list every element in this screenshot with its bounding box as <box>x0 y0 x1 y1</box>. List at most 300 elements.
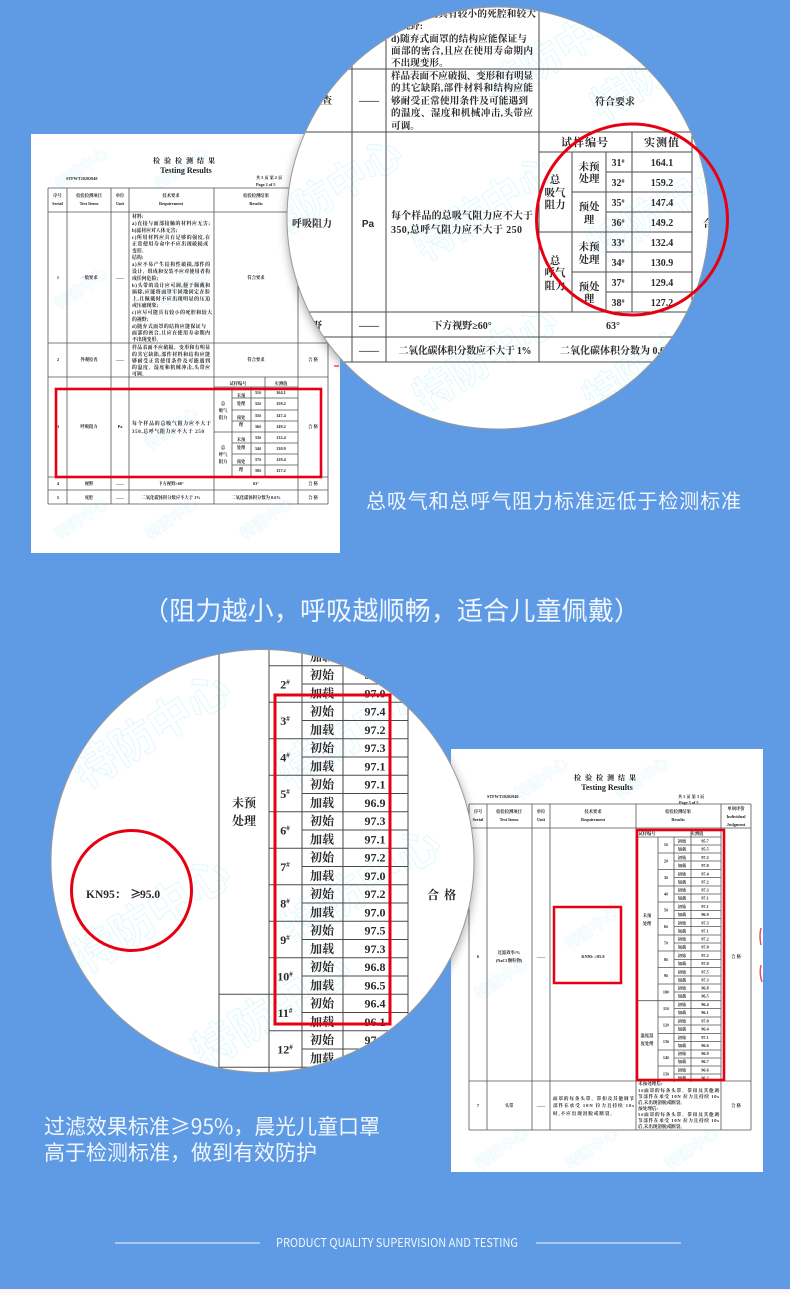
panel: test report page 2: 一般要求 <box>80 274 98 281</box>
footer: product quality tagline: PRODUCT QUALITY SUPERVISION AND TESTING <box>276 1234 518 1251</box>
caption: resistance far below standard: 总吸气和总呼气阻力标准远低于检测标准 <box>366 485 741 514</box>
panel: test report page 2: 样品表面不应破损、变形和有明显 <box>132 344 210 351</box>
panel: test report page 3: 加载 <box>678 992 687 1000</box>
magnifier: breathing resistance detail: 149.2 <box>651 218 673 229</box>
panel: test report page 3: 加载 <box>678 976 687 984</box>
panel: test report page 2: 材料: <box>132 213 144 220</box>
magnifier: breathing resistance detail: 31 <box>612 158 622 169</box>
magnifier: breathing resistance detail: 特防中心 <box>246 121 412 255</box>
magnifier: filtration efficiency detail: # <box>289 970 293 978</box>
panel: test report page 3: 4# <box>664 892 669 896</box>
panel: test report page 3: 初始 <box>678 903 687 910</box>
magnifier: breathing resistance detail: 132.4 <box>651 238 673 249</box>
magnifier: filtration efficiency detail: 加载 <box>310 795 335 810</box>
magnifier: breathing resistance detail: 符合要求 <box>595 95 635 108</box>
panel: test report page 3: 部件在承受 10N 拉力且持续 10s <box>553 1102 634 1109</box>
panel: test report page 2: 特防中心 <box>151 262 212 314</box>
magnifier: filtration efficiency detail: # <box>286 934 290 942</box>
panel: test report page 2: 159.2 <box>276 401 286 406</box>
panel: test report page 2: 5 <box>57 495 59 500</box>
panel: test report page 3: Results <box>671 817 685 822</box>
panel: test report page 2: 38# <box>255 468 262 473</box>
magnifier: breathing resistance detail: 特防中心 <box>578 0 744 132</box>
magnifier: filtration efficiency detail: # <box>286 752 290 760</box>
magnifier: filtration efficiency detail: 未预 <box>232 795 257 810</box>
panel: test report page 3: 技术要求 <box>584 808 602 815</box>
panel: test report page 2: a)应不易产生结构性破损,部件的 <box>132 261 210 268</box>
magnifier: breathing resistance detail: 127.2 <box>651 298 673 309</box>
panel: test report page 3: 97.0 <box>701 1018 709 1024</box>
panel: test report page 2: 阻力 <box>219 414 227 421</box>
panel: test report page 2: 33# <box>255 435 262 440</box>
panel: test report page 2: 正常使用寿命中不应出现破损或 <box>132 240 208 248</box>
panel: test report page 3: 96.4 <box>701 1026 710 1032</box>
magnifier: filtration efficiency detail: 97.1 <box>364 832 386 846</box>
panel: test report page 2: 特防中心 <box>141 492 202 544</box>
magnifier: breathing resistance detail: 32 <box>612 178 622 189</box>
magnifier: filtration efficiency detail: 加载 <box>310 904 335 919</box>
magnifier: filtration efficiency detail: 加载 <box>310 722 335 737</box>
red highlight: breathing resistance row <box>56 389 321 477</box>
panel: test report page 2: 变形。 <box>132 248 147 254</box>
magnifier: breathing resistance detail: 理 <box>584 214 595 226</box>
panel: test report page 2: 特防中心 <box>51 492 112 544</box>
panel: test report page 2: 3 <box>57 424 59 429</box>
panel: test report page 2: 或压痛现象; <box>132 302 158 309</box>
panel: test report page 3: 特防中心 <box>471 1122 532 1174</box>
magnifier: breathing resistance detail: 特防中心 <box>576 138 742 272</box>
panel: test report page 2: 总 <box>221 444 226 451</box>
panel: test report page 2: 不出现变形。 <box>132 336 161 343</box>
magnifier: breathing resistance detail: # <box>622 299 624 305</box>
magnifier: breathing resistance detail: 特防中心 <box>401 288 567 422</box>
panel: test report page 3: 试样编号 <box>638 830 656 837</box>
panel: test report page 2: 死腔 <box>85 494 94 501</box>
panel: test report page 2: 特防中心 <box>151 142 212 194</box>
magnifier: breathing resistance detail: 下方视野≥60° <box>432 319 492 332</box>
panel: test report page 3: 97.3 <box>701 888 709 892</box>
panel: test report page 2: 检验检测项目 <box>76 192 102 199</box>
panel: test report page 2: Pa <box>118 424 123 429</box>
panel: test report page 2: 32# <box>255 401 262 406</box>
panel: test report page 3: 7# <box>664 940 669 946</box>
panel: test report page 3: 初始 <box>678 870 687 878</box>
panel: test report page 3: 加载 <box>678 846 687 852</box>
panel: test report page 3: 95.7 <box>701 838 709 844</box>
panel: test report page 2: 1 <box>57 275 59 280</box>
magnifier: breathing resistance detail: Pa <box>362 219 375 230</box>
magnifier: breathing resistance detail: 实测值 <box>644 135 680 149</box>
panel: test report page 3: 预处理后: <box>638 1105 658 1112</box>
panel: test report page 2: 147.4 <box>276 413 287 418</box>
panel: test report page 3: 97.4 <box>701 872 710 876</box>
panel: test report page 2: 视野 <box>85 480 94 487</box>
panel: test report page 2: 处理 <box>237 400 246 407</box>
magnifier: breathing resistance detail: 的视野: <box>391 20 423 32</box>
panel: test report page 2: 37# <box>255 457 262 462</box>
magnifier: breathing resistance detail: 特防中心 <box>401 138 567 272</box>
panel: test report page 2: 结构: <box>132 254 144 261</box>
panel: test report page 3: 特防中心 <box>611 752 672 804</box>
magnifier: filtration efficiency detail: 处理 <box>232 813 256 828</box>
panel: test report page 2: 合 格 <box>308 480 319 487</box>
magnifier: filtration efficiency detail: 7 <box>280 860 286 874</box>
panel: test report page 3: 初始 <box>678 838 687 844</box>
panel: test report page 3: 6# <box>664 924 669 929</box>
magnifier: filtration efficiency detail: # <box>289 1044 293 1052</box>
red highlight: filtration results column <box>637 830 724 1080</box>
magnifier: breathing resistance detail: 吸气 <box>544 186 566 199</box>
panel: test report page 3: 96.4 <box>701 1002 710 1007</box>
panel: test report page 2: b)头带的设计应可调,便于佩戴和 <box>132 282 210 289</box>
panel: test report page 2: 阻力 <box>219 458 227 465</box>
panel: test report page 2: 二氧化碳体积分数为 0.6% <box>231 494 281 501</box>
magnifier: filtration efficiency detail: 合 格 <box>427 887 457 902</box>
panel: test report page 2: 130.9 <box>276 446 286 451</box>
panel: test report page 3: 加载 <box>678 1074 687 1082</box>
panel: test report page 3: 加载 <box>678 894 687 902</box>
magnifier shadow on report page 2 <box>281 134 340 370</box>
panel: test report page 3: 5# <box>664 908 669 912</box>
magnifier: filtration efficiency detail: 97.3 <box>364 942 386 956</box>
panel: test report page 3: 3# <box>664 875 669 880</box>
magnifier: breathing resistance detail: c)应尽可能具有较小的死腔和较大 <box>391 8 536 20</box>
panel: test report page 2: 164.1 <box>276 390 286 395</box>
magnifier: filtration efficiency detail: 12 <box>277 1042 289 1056</box>
panel: test report page 2: 处理 <box>237 444 246 451</box>
panel: test report page 2: 合 格 <box>308 356 319 363</box>
magnifier: breathing resistance detail: 阻力 <box>544 198 566 211</box>
panel: test report page 2: 特防中心 <box>236 492 297 544</box>
magnifier: filtration efficiency detail: 6 <box>280 824 286 838</box>
panel: test report page 3: 14# <box>663 1055 670 1060</box>
panel: test report page 2 <box>31 134 340 553</box>
panel: test report page 3: 初始 <box>678 886 687 894</box>
magnifier: filtration efficiency detail: 特防中心 <box>58 653 241 801</box>
panel: test report page 2: 合 格 <box>308 423 319 430</box>
panel: test report page 3: 97.1 <box>701 928 709 934</box>
magnifier: breathing resistance detail: 37 <box>612 278 622 289</box>
panel: test report page 2: 特防中心 <box>141 402 202 454</box>
panel: test report page 3: 加载 <box>678 1009 687 1016</box>
panel: test report page 3: 单位 <box>537 808 546 815</box>
panel: test report page 3: 未预 <box>643 912 652 919</box>
panel: test report page 3: 检验检测项目 <box>496 808 522 815</box>
magnifier: filtration efficiency detail: 初始 <box>310 959 335 974</box>
magnifier: filtration efficiency detail: 加载 <box>310 868 335 883</box>
panel: test report page 3: 加载 <box>678 928 687 934</box>
magnifier: breathing resistance detail: 预处 <box>578 280 600 293</box>
panel: test report page 3: 面罩的每条头带、带扣及其他调节 <box>553 1095 634 1102</box>
panel: test report page 3: 96.7 <box>701 1059 709 1064</box>
magnifier: breathing resistance detail: # <box>622 239 624 245</box>
magnifier: breathing resistance detail: 特防中心 <box>571 291 737 425</box>
magnifier: filtration efficiency detail: 96.8 <box>364 960 386 974</box>
panel: test report page 2: —— <box>115 481 125 486</box>
magnifier: filtration efficiency detail: 97.0 <box>364 1033 386 1047</box>
panel: test report page 2: 的视野; <box>132 316 149 323</box>
caption: filtration above standard <box>44 1111 380 1167</box>
panel: test report page 2: 未预 <box>237 392 246 399</box>
magnifier: filtration efficiency detail: 97.0 <box>364 905 386 919</box>
magnifier: breathing resistance detail: —— <box>358 96 380 107</box>
panel: test report page 3: 节部件在承受 10N 拉力且持续 10s <box>638 1117 719 1124</box>
panel: test report page 3: 9# <box>664 973 669 978</box>
magnifier: breathing resistance detail: # <box>622 179 624 185</box>
magnifier: filtration efficiency detail: 初始 <box>310 886 335 901</box>
magnifier: breathing resistance detail: 未预 <box>578 160 600 173</box>
panel: test report page 2: 检验检测结果 <box>243 192 270 199</box>
panel: test report page 3: Individual <box>726 814 746 819</box>
panel: test report page 2: a)直接与面部接触的材料应无害; <box>132 220 210 227</box>
panel: test report page 3: 5#面罩的每条头带、带扣及其他调 <box>638 1111 719 1118</box>
panel: test report page 3: Test Items <box>500 817 519 822</box>
magnifier: filtration efficiency detail: 加载 <box>310 1050 335 1065</box>
panel: test report page 3: 加载 <box>678 911 687 918</box>
magnifier: filtration efficiency detail: 5 <box>280 787 286 801</box>
panel: test report page 2: 预处 <box>237 458 246 465</box>
magnifier: filtration efficiency detail: 97.1 <box>364 759 386 773</box>
panel: test report page 3: 度处理 <box>641 1040 654 1047</box>
panel: test report page 2: Testing Results <box>160 166 212 175</box>
panel: test report page 3: 6 <box>477 954 480 959</box>
panel: test report page 2: 2 <box>57 357 59 362</box>
magnifier: filtration efficiency detail: 97.5 <box>364 924 386 938</box>
panel: test report page 3: 15# <box>663 1072 670 1076</box>
panel: test report page 3: 初始 <box>678 968 687 976</box>
panel: test report page 3: 特防中心 <box>561 902 622 954</box>
panel: test report page 3: 97.0 <box>701 863 709 868</box>
panel: test report page 3: —— <box>536 1103 546 1108</box>
magnifier: breathing resistance detail: —— <box>358 346 380 357</box>
magnifier: breathing resistance detail: 36 <box>612 218 622 229</box>
magnifier: breathing resistance detail: 二氧化碳体积分数为 0.6% <box>560 344 675 357</box>
panel: test report page 3: 97.3 <box>701 978 709 982</box>
magnifier: filtration efficiency detail: KN95： <box>86 889 126 901</box>
panel: test report page 2: 4 <box>57 481 60 486</box>
panel: test report page 2: 总 <box>221 400 226 407</box>
panel: test report page 3: 加载 <box>678 1026 687 1032</box>
magnifier: breathing resistance detail: 34 <box>612 258 622 269</box>
magnifier: filtration efficiency detail: # <box>286 861 290 869</box>
panel: test report page 3: 96.6 <box>701 1068 709 1072</box>
magnifier: filtration efficiency detail: 97.4 <box>364 704 386 718</box>
magnifier shadow on report page 3 <box>451 755 480 973</box>
magnifier: breathing resistance detail: # <box>622 159 624 165</box>
magnifier: filtration efficiency detail: 特防中心 <box>263 653 446 801</box>
panel: test report page 3: 初始 <box>678 1018 687 1024</box>
panel: test report page 2: 149.2 <box>276 424 286 429</box>
magnifier: breathing resistance detail: 164.1 <box>651 158 673 169</box>
panel: test report page 3: 加载 <box>678 862 687 869</box>
panel: test report page 2: 每个样品的总吸气阻力应不大于 <box>132 420 211 427</box>
magnifier: filtration efficiency detail: # <box>286 898 290 906</box>
panel: test report page 3: 初始 <box>678 1066 687 1074</box>
magnifier: filtration efficiency detail: 97.2 <box>364 723 386 737</box>
magnifier: filtration efficiency detail: 初始 <box>310 667 335 682</box>
panel: test report page 3: 97.1 <box>701 904 709 909</box>
panel: test report page 2: 试样编号 <box>229 380 247 387</box>
panel: test report page 3: 97.2 <box>701 855 709 860</box>
magnifier: filtration efficiency detail: # <box>286 678 290 686</box>
panel: test report page 3: 97.0 <box>701 944 709 950</box>
red circle: measured resistance values <box>536 124 728 315</box>
panel: test report page 2: 设计、组成和安装不应对使用者构 <box>132 268 210 275</box>
panel: test report page 3: 特防中心 <box>511 752 572 804</box>
panel: test report page 3: 头带 <box>505 1102 514 1109</box>
panel: test report page 2: 序号 <box>53 192 62 199</box>
panel: test report page 3: 95.5 <box>701 846 709 852</box>
panel: test report page 2: 摘除,应能将面罩牢固地固定在脸 <box>132 288 210 296</box>
panel: test report page 3: KN95: ≥95.0 <box>581 954 605 959</box>
panel: test report page 2: b)滤材应对人体无害; <box>132 227 177 234</box>
panel: test report page 3: 97.2 <box>701 880 709 884</box>
panel: test report page 3: 初始 <box>678 984 687 992</box>
magnifier: filtration efficiency detail: 97.0 <box>364 686 386 700</box>
magnifier: filtration efficiency detail: 初始 <box>310 850 335 864</box>
panel: test report page 3: 合 格 <box>731 953 742 960</box>
magnifier: filtration efficiency detail: 加载 <box>310 977 335 992</box>
magnifier: filtration efficiency detail: # <box>286 824 290 832</box>
magnifier: filtration efficiency detail: 11 <box>278 1006 289 1020</box>
panel: test report page 3: 共 5 页 第 3 页 <box>678 793 705 800</box>
magnifier: breathing resistance detail: 130.9 <box>651 258 673 269</box>
magnifier: breathing resistance detail: 总 <box>550 173 561 186</box>
panel: test report page 3: (NaCl 颗粒物) <box>496 957 523 964</box>
panel: test report page 3: 97.1 <box>701 1035 709 1040</box>
magnifier: breathing resistance detail: 呼吸阻力 <box>292 217 332 230</box>
panel: test report page 3: 96.2 <box>701 1076 709 1080</box>
magnifier: filtration efficiency detail: 加载 <box>310 758 335 773</box>
panel: test report page 3: 96.9 <box>701 1051 709 1056</box>
magnifier: breathing resistance detail: 样品表面不应破损、变形和有明显 <box>391 70 533 82</box>
panel: test report page 3: 97.3 <box>701 920 709 926</box>
panel: test report page 3: 10# <box>663 990 670 994</box>
magnifier: breathing resistance detail: 合 <box>703 217 713 230</box>
panel: test report page 3: 单项评价 <box>727 805 745 812</box>
panel: test report page 2: 的温度、湿度和机械冲击,头带应 <box>132 364 210 371</box>
panel: test report page 3: 后,未出现滑脱或断裂。 <box>638 1099 685 1106</box>
magnifier: breathing resistance detail: 63° <box>606 321 620 332</box>
panel: test report page 2: 吸气 <box>219 407 228 414</box>
panel: test report page 3: 加载 <box>678 878 687 886</box>
magnifier: breathing resistance detail: 呼气 <box>544 266 566 279</box>
magnifier: filtration efficiency detail: # <box>286 715 290 723</box>
panel: test report page 2: 符合要求 <box>247 356 265 363</box>
panel: test report page 3 <box>451 749 763 1174</box>
panel: test report page 2: 理 <box>239 421 244 427</box>
panel: test report page 2: 31# <box>255 390 262 395</box>
magnifier: breathing resistance detail: 的其它缺陷,部件材料和结构应能 <box>391 82 533 94</box>
panel: test report page 2: 350,总呼气阻力应不大于 250 <box>132 428 205 435</box>
panel: test report page 2: 36# <box>255 424 262 429</box>
magnifier: breathing resistance detail: # <box>622 259 624 265</box>
panel: test report page 3: 初始 <box>678 854 687 861</box>
panel: test report page 3: Testing Results <box>581 783 633 792</box>
panel: test report page 3: 96.5 <box>701 994 709 998</box>
panel: test report page 3: STFWT20202940 <box>487 794 518 799</box>
panel: test report page 2: 理 <box>239 466 244 472</box>
magnifier: breathing resistance detail: 35 <box>612 198 622 209</box>
red circle: KN95 requirement <box>72 830 192 950</box>
panel: test report page 2: Unit <box>116 201 125 206</box>
panel: test report page 3: 特防中心 <box>471 952 532 1004</box>
panel: test report page 2: —— <box>115 357 125 362</box>
panel: test report page 2: 129.4 <box>276 457 287 462</box>
panel: test report page 2: 合 格 <box>308 494 319 501</box>
magnifier: breathing resistance detail: 每个样品的总吸气阻力应不大于 <box>391 209 533 222</box>
panel: test report page 3: —— <box>536 954 546 959</box>
magnifier: filtration efficiency detail: 特防中心 <box>58 838 241 986</box>
magnifier: filtration efficiency detail: 96.4 <box>364 1051 386 1065</box>
panel: test report page 3: 加载 <box>678 960 687 967</box>
panel: test report page 2: 下方视野≥60° <box>158 480 184 487</box>
panel: test report page 2: 特防中心 <box>51 262 112 314</box>
panel: test report page 3: 初始 <box>678 1050 687 1057</box>
magnifier: breathing resistance detail: 159.2 <box>651 178 673 189</box>
panel: test report page 3: 节部件在承受 10N 拉力且持续 10s <box>638 1093 719 1100</box>
panel: test report page 2: d)随弃式面罩的结构应能保证与 <box>132 323 206 330</box>
panel: test report page 2: 面部的密合,且应在使用寿命期内 <box>132 330 210 336</box>
panel: test report page 2: —— <box>115 275 125 280</box>
caption: filtration above standard: 高于检测标准，做到有效防护 <box>44 1137 317 1167</box>
panel: test report page 2: c)应尽可能具有较小的死腔和较大 <box>132 309 212 316</box>
panel: test report page 3: Judgment <box>727 822 746 827</box>
magnifier: filtration efficiency detail: 特防中心 <box>178 933 361 1081</box>
magnifier: filtration efficiency detail: 97.3 <box>364 814 386 828</box>
panel: test report page 3: Unit <box>537 817 546 822</box>
magnifier: filtration efficiency detail: 4 <box>280 750 286 764</box>
magnifier: filtration efficiency detail: 10 <box>277 970 289 984</box>
magnifier: filtration efficiency detail: 97.3 <box>364 741 386 755</box>
magnifier: breathing resistance detail: 129.4 <box>651 278 673 289</box>
magnifier: breathing resistance detail: 视野 <box>302 319 322 332</box>
panel: test report page 3: 初始 <box>678 952 687 959</box>
magnifier: filtration efficiency detail: 加载 <box>310 831 335 846</box>
magnifier: breathing resistance detail: # <box>622 279 624 285</box>
panel: test report page 3: 96.1 <box>701 1010 709 1015</box>
panel: test report page 2: —— <box>115 495 125 500</box>
magnifier: filtration efficiency detail <box>51 640 474 1081</box>
panel: test report page 2: 够耐受正常使用条件及可能遇到 <box>132 358 210 364</box>
panel: test report page 2: Results <box>249 201 263 206</box>
panel: test report page 2: 35# <box>255 413 262 418</box>
magnifier: breathing resistance detail: # <box>622 199 624 205</box>
panel: test report page 3: Serial <box>473 817 484 822</box>
magnifier: filtration efficiency detail: 加载 <box>310 685 335 700</box>
panel: test report page 2: 技术要求 <box>162 192 180 199</box>
caption: filtration above standard: 过滤效果标准≥95%，晨光儿童口罩 <box>44 1111 380 1141</box>
magnifier: filtration efficiency detail: 初始 <box>310 1032 335 1047</box>
magnifier: filtration efficiency detail: 2 <box>280 678 286 692</box>
magnifier: breathing resistance detail: 不出现变形。 <box>391 57 449 69</box>
panel: test report page 3: 97.1 <box>701 896 709 900</box>
magnifier: filtration efficiency detail: 96.4 <box>364 996 386 1010</box>
panel: test report page 2: 共 5 页 第 2 页 <box>256 174 283 181</box>
panel: test report page 3: 加载 <box>678 1058 687 1065</box>
panel: test report page 3: 8# <box>664 957 669 962</box>
magnifier: breathing resistance detail: 350,总呼气阻力应不大于 250 <box>391 223 522 236</box>
panel: test report page 2: Serial <box>52 201 64 206</box>
magnifier: filtration efficiency detail: 96.9 <box>364 796 386 810</box>
heading: lower resistance suits children: （阻力越小，呼吸越顺畅，适合儿童佩戴） <box>143 591 640 628</box>
magnifier: filtration efficiency detail: 97.2 <box>364 850 386 864</box>
magnifier: breathing resistance detail: 面部的密合,且应在使用寿命期内 <box>391 45 533 57</box>
magnifier: filtration efficiency detail: 加载 <box>310 941 335 956</box>
panel: test report page 2: 单位 <box>116 192 125 199</box>
magnifier: breathing resistance detail: 预处 <box>578 200 600 213</box>
panel: test report page 3: 13# <box>663 1039 670 1044</box>
